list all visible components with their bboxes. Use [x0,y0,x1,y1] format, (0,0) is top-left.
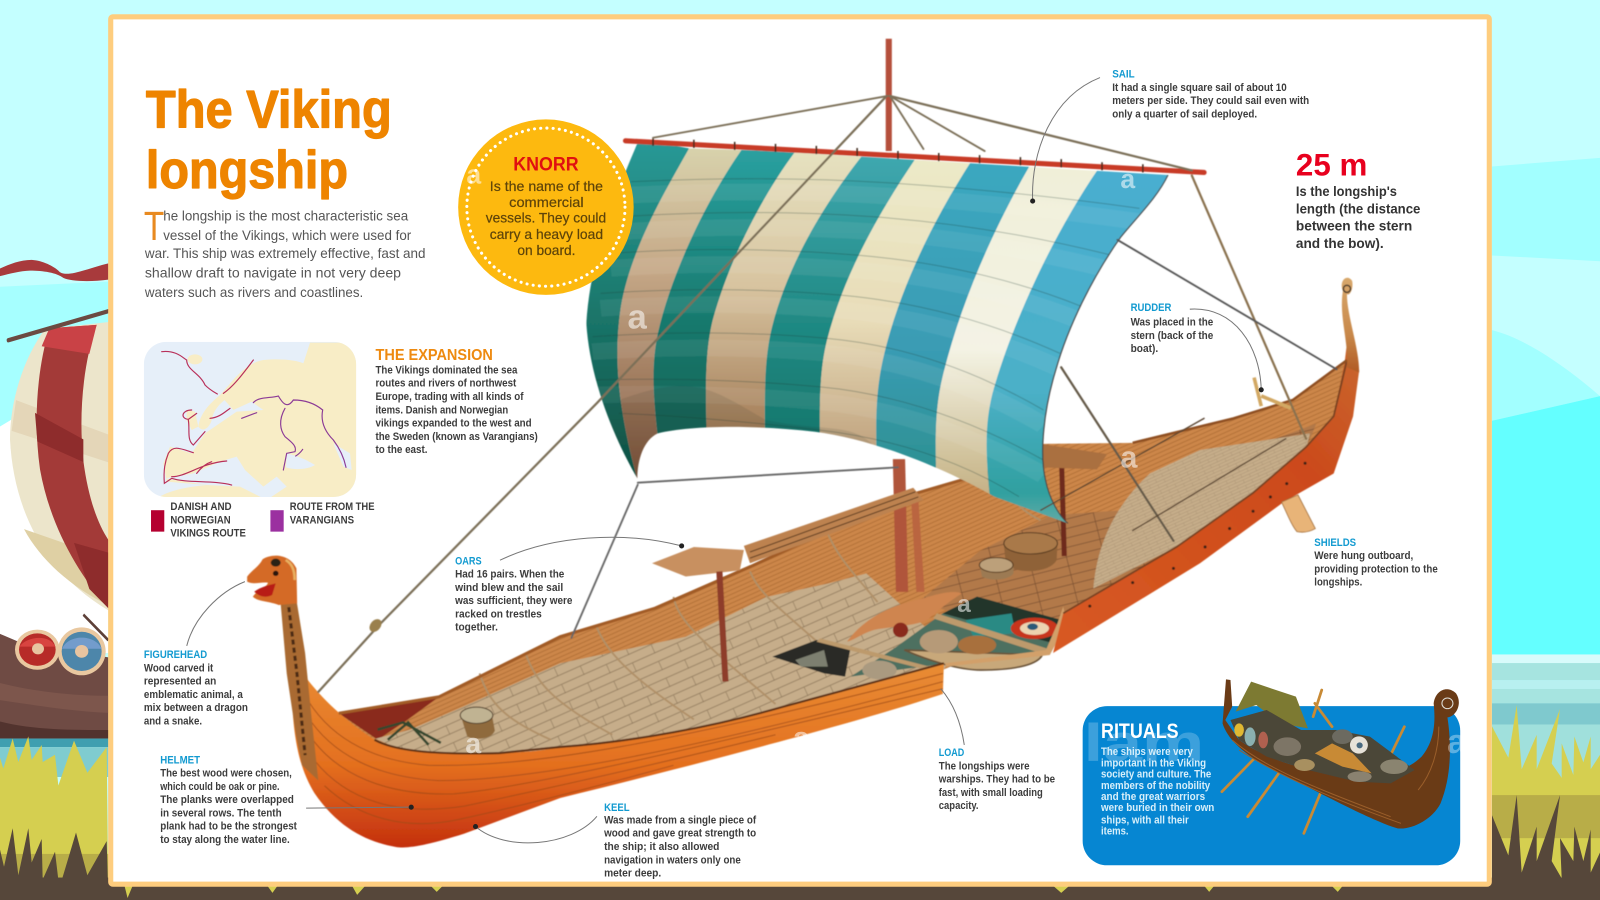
ship: yard [626,141,1204,172]
intro paragraph: waters such as rivers and coastlines. [144,285,363,301]
label: keel: wood and gave great strength to [603,828,757,840]
legend: varangian route [270,501,374,532]
label: shields [1314,537,1438,589]
knorr: text: Is the name of the [490,179,603,194]
expansion section [376,347,538,456]
ship: tiller [1254,378,1291,408]
ship: figurehead [247,556,297,605]
ship: rear hull [1053,327,1359,653]
leader lines [187,78,1264,843]
label: keel: meter deep. [604,868,661,880]
ship: viking longship illustration [247,39,1359,847]
map: Black Sea [286,453,315,469]
label: sail: only a quarter of sail deployed. [1112,108,1257,120]
burial ship: tent [1236,682,1308,728]
label: rudder [1131,302,1213,355]
watermarks: a [1447,723,1467,761]
burial ship: hull [1223,679,1459,829]
intro paragraph: shallow draft to navigate in not very deep [145,266,401,282]
label: shields: longships. [1314,577,1362,589]
label: helmet: to stay along the water line. [160,834,290,846]
knorr: text: on board. [517,243,576,258]
intro paragraph [144,208,426,301]
ship: lower mast [893,459,908,592]
label: figurehead: FIGUREHEAD [144,649,207,661]
rituals: text: ships, with all their [1101,814,1189,826]
expansion: text: the Sweden (known as Varangians) [376,431,538,443]
burial ship: grave goods [1230,710,1415,783]
label: load: warships. They had to be [938,774,1055,786]
ship: wall ribs [480,474,1041,740]
map: Britain [187,410,198,430]
background: small sail [10,322,110,610]
label: oars: OARS [455,555,482,567]
ship: mast top [886,39,892,151]
rituals: text: important in the Viking [1101,757,1206,769]
legend: danish and norwegian route: NORWEGIAN [170,514,231,526]
ship: rear hull rivets [1088,462,1307,608]
background: left viking boat, sea and grass [0,260,110,900]
label: load: LOAD [939,747,965,759]
label: keel: KEEL [604,802,630,814]
panel: rituals [1083,679,1460,865]
label: keel: the ship; it also allowed [604,841,719,853]
map: viking routes across Europe [144,342,360,500]
burial ship: hull planks [1232,727,1439,823]
stat: description: and the bow). [1296,236,1384,252]
label: rudder: stern (back of the [1131,330,1213,342]
stat: description: length (the distance [1296,201,1420,217]
expansion: text: vikings expanded to the west and [376,418,532,430]
rituals: text: society and culture. The [1101,769,1211,781]
watermarks: a [957,591,971,618]
label: figurehead: Wood carved it [144,662,214,674]
ship: bow gear and small barrel [378,707,495,745]
label: oars: together. [455,622,498,634]
watermarks: a [1120,164,1135,194]
legend: varangian route: ROUTE FROM THE [290,501,374,513]
label: figurehead: mix between a dragon [144,702,248,714]
label: helmet: The planks were overlapped [160,794,294,806]
stat: value: 25 m [1296,147,1367,183]
expansion: text: Europe, trading with all kinds of [376,391,524,403]
ship: front hull [293,663,944,847]
rituals: text: members of the nobility [1101,780,1210,792]
intro paragraph: vessel of the Vikings, which were used for [163,228,411,244]
title: The Viking [146,81,392,140]
background: red shield [15,630,60,670]
background: boat hull [0,634,108,739]
watermarks: a [1120,440,1138,474]
ship: stern post and curl [1342,278,1359,372]
rituals: text: and the great warriors [1101,791,1205,803]
rituals: watermark: lam [1084,714,1204,773]
rituals: burial ship [1222,679,1459,833]
label: figurehead: represented an [144,676,216,688]
legend: danish and norwegian route [151,501,246,540]
background: left sky band [0,282,108,429]
expansion: text: items. Danish and Norwegian [376,404,508,416]
watermarks: a [465,728,482,760]
knorr: text: commercial [509,195,584,210]
map: Mediterranean [165,457,287,500]
ship: light section of rear deck [1093,433,1310,588]
watermarks: a [628,299,648,337]
ship: oar rack and trestles [652,444,1107,682]
legend: danish and norwegian route: VIKINGS ROUTE [170,528,246,540]
ship: sail edge rope [1043,175,1168,523]
knorr callout [458,119,634,295]
title [146,81,392,200]
ship: sail [586,143,1168,524]
rituals: text [1100,746,1214,838]
ship: mast partner [847,592,962,642]
label: helmet: which could be oak or pine. [159,781,280,793]
background: ground strip [0,878,1600,900]
expansion: text: The Vikings dominated the sea [376,364,518,376]
ship: cutaway cargo hold [772,597,1067,679]
stat: description: Is the longship's [1296,184,1397,200]
watermarks: a [466,160,481,190]
label: sail: meters per side. They could sail even with [1112,95,1309,107]
ship: neck and stem [281,603,318,781]
rituals: blue panel [1083,706,1460,865]
background: left white ground [0,408,108,653]
background: dark grass [0,828,108,900]
label: shields: providing protection to the [1314,563,1438,575]
label: load: fast, with small loading [939,787,1043,799]
map: viking routes [162,351,253,485]
stat: 25 m length [1296,147,1420,252]
label: shields: SHIELDS [1314,537,1356,549]
label: sail [1112,69,1309,120]
ship: front deck [376,573,954,761]
burial ship: oars [1222,690,1404,833]
expansion: text: routes and rivers of northwest [376,378,517,390]
label: keel: Was made from a single piece of [604,814,757,826]
label: figurehead [144,649,248,727]
knorr: text: carry a heavy load [490,227,603,242]
background: sea strip [0,739,108,747]
ship: far gunwale [339,444,1043,713]
expansion: text [376,364,538,456]
ship: rear gunwale [1063,360,1347,613]
background: flag [0,260,108,281]
ship: barrels [979,533,1057,580]
stat: description: between the stern [1296,219,1412,235]
label: figurehead: emblematic animal, a [144,689,244,701]
knorr: dotted ring [467,128,625,286]
label: helmet: HELMET [160,754,200,766]
legend: danish and norwegian route: DANISH AND [170,501,232,513]
label: rudder: Was placed in the [1131,317,1213,329]
intro paragraph: war. This ship was extremely effective, fast and [144,246,426,262]
legend: varangian route: VARANGIANS [290,514,354,526]
label: shields: Were hung outboard, [1314,550,1413,562]
label: sail: It had a single square sail of about 10 [1112,82,1287,94]
ship: rudder blade [1282,495,1315,532]
label: figurehead: and a snake. [144,715,202,727]
ship: rear deck [918,423,1316,633]
label: keel [603,802,757,880]
map: Iceland [188,354,202,364]
stat: description [1296,184,1420,252]
label: helmet: plank had to be the strongest [160,821,297,833]
label: helmet: The best wood were chosen, [160,768,292,780]
label: sail: SAIL [1112,69,1135,81]
label: load: capacity. [939,800,979,812]
intro text [144,203,426,301]
ship: dark bow interior [339,697,439,740]
label: load [938,747,1055,812]
label: keel: navigation in waters only one [604,854,741,866]
intro paragraph: he longship is the most characteristic sea [163,208,408,224]
label: helmet: in several rows. The tenth [160,807,282,819]
label: load: The longships were [939,760,1030,772]
ship: rigging ropes [318,96,1337,692]
label: rudder: RUDDER [1131,302,1172,314]
background: yard [8,311,108,340]
rituals: text: were buried in their own [1100,802,1214,814]
label: helmet [159,754,297,846]
ship: forestay block [367,617,384,634]
label: oars: Had 16 pairs. When the [455,569,564,581]
ship: interior wall [339,360,1352,761]
map: land [155,343,360,500]
expansion: text: to the east. [376,444,428,456]
label: oars [454,555,572,634]
background: yellow grass [0,736,108,900]
watermarks: a [793,721,811,755]
rituals: text: items. [1101,826,1129,838]
label: rudder: boat). [1131,343,1158,355]
rituals: text: The ships were very [1101,746,1193,758]
knorr: text [486,179,606,258]
ship: hull planks [304,673,943,824]
expansion: heading: THE EXPANSION [376,347,493,364]
map: Scandinavia [198,395,227,429]
label: oars: wind blew and the sail [454,582,563,594]
knorr: text: vessels. They could [486,210,606,225]
title: longship [146,141,348,200]
map: Caspian [333,443,352,470]
background: right sky and sea [1492,158,1600,900]
watermarks [465,160,1467,761]
intro drop cap: T [144,203,164,249]
background: blue shield [58,627,106,675]
rituals: heading: RITUALS [1101,719,1179,743]
label: oars: was sufficient, they were [454,595,572,607]
burial ship: stern spiral [1442,698,1453,709]
label: oars: racked on trestles [455,608,542,620]
knorr: heading: KNORR [513,153,579,175]
knorr: yellow circle [458,119,634,295]
